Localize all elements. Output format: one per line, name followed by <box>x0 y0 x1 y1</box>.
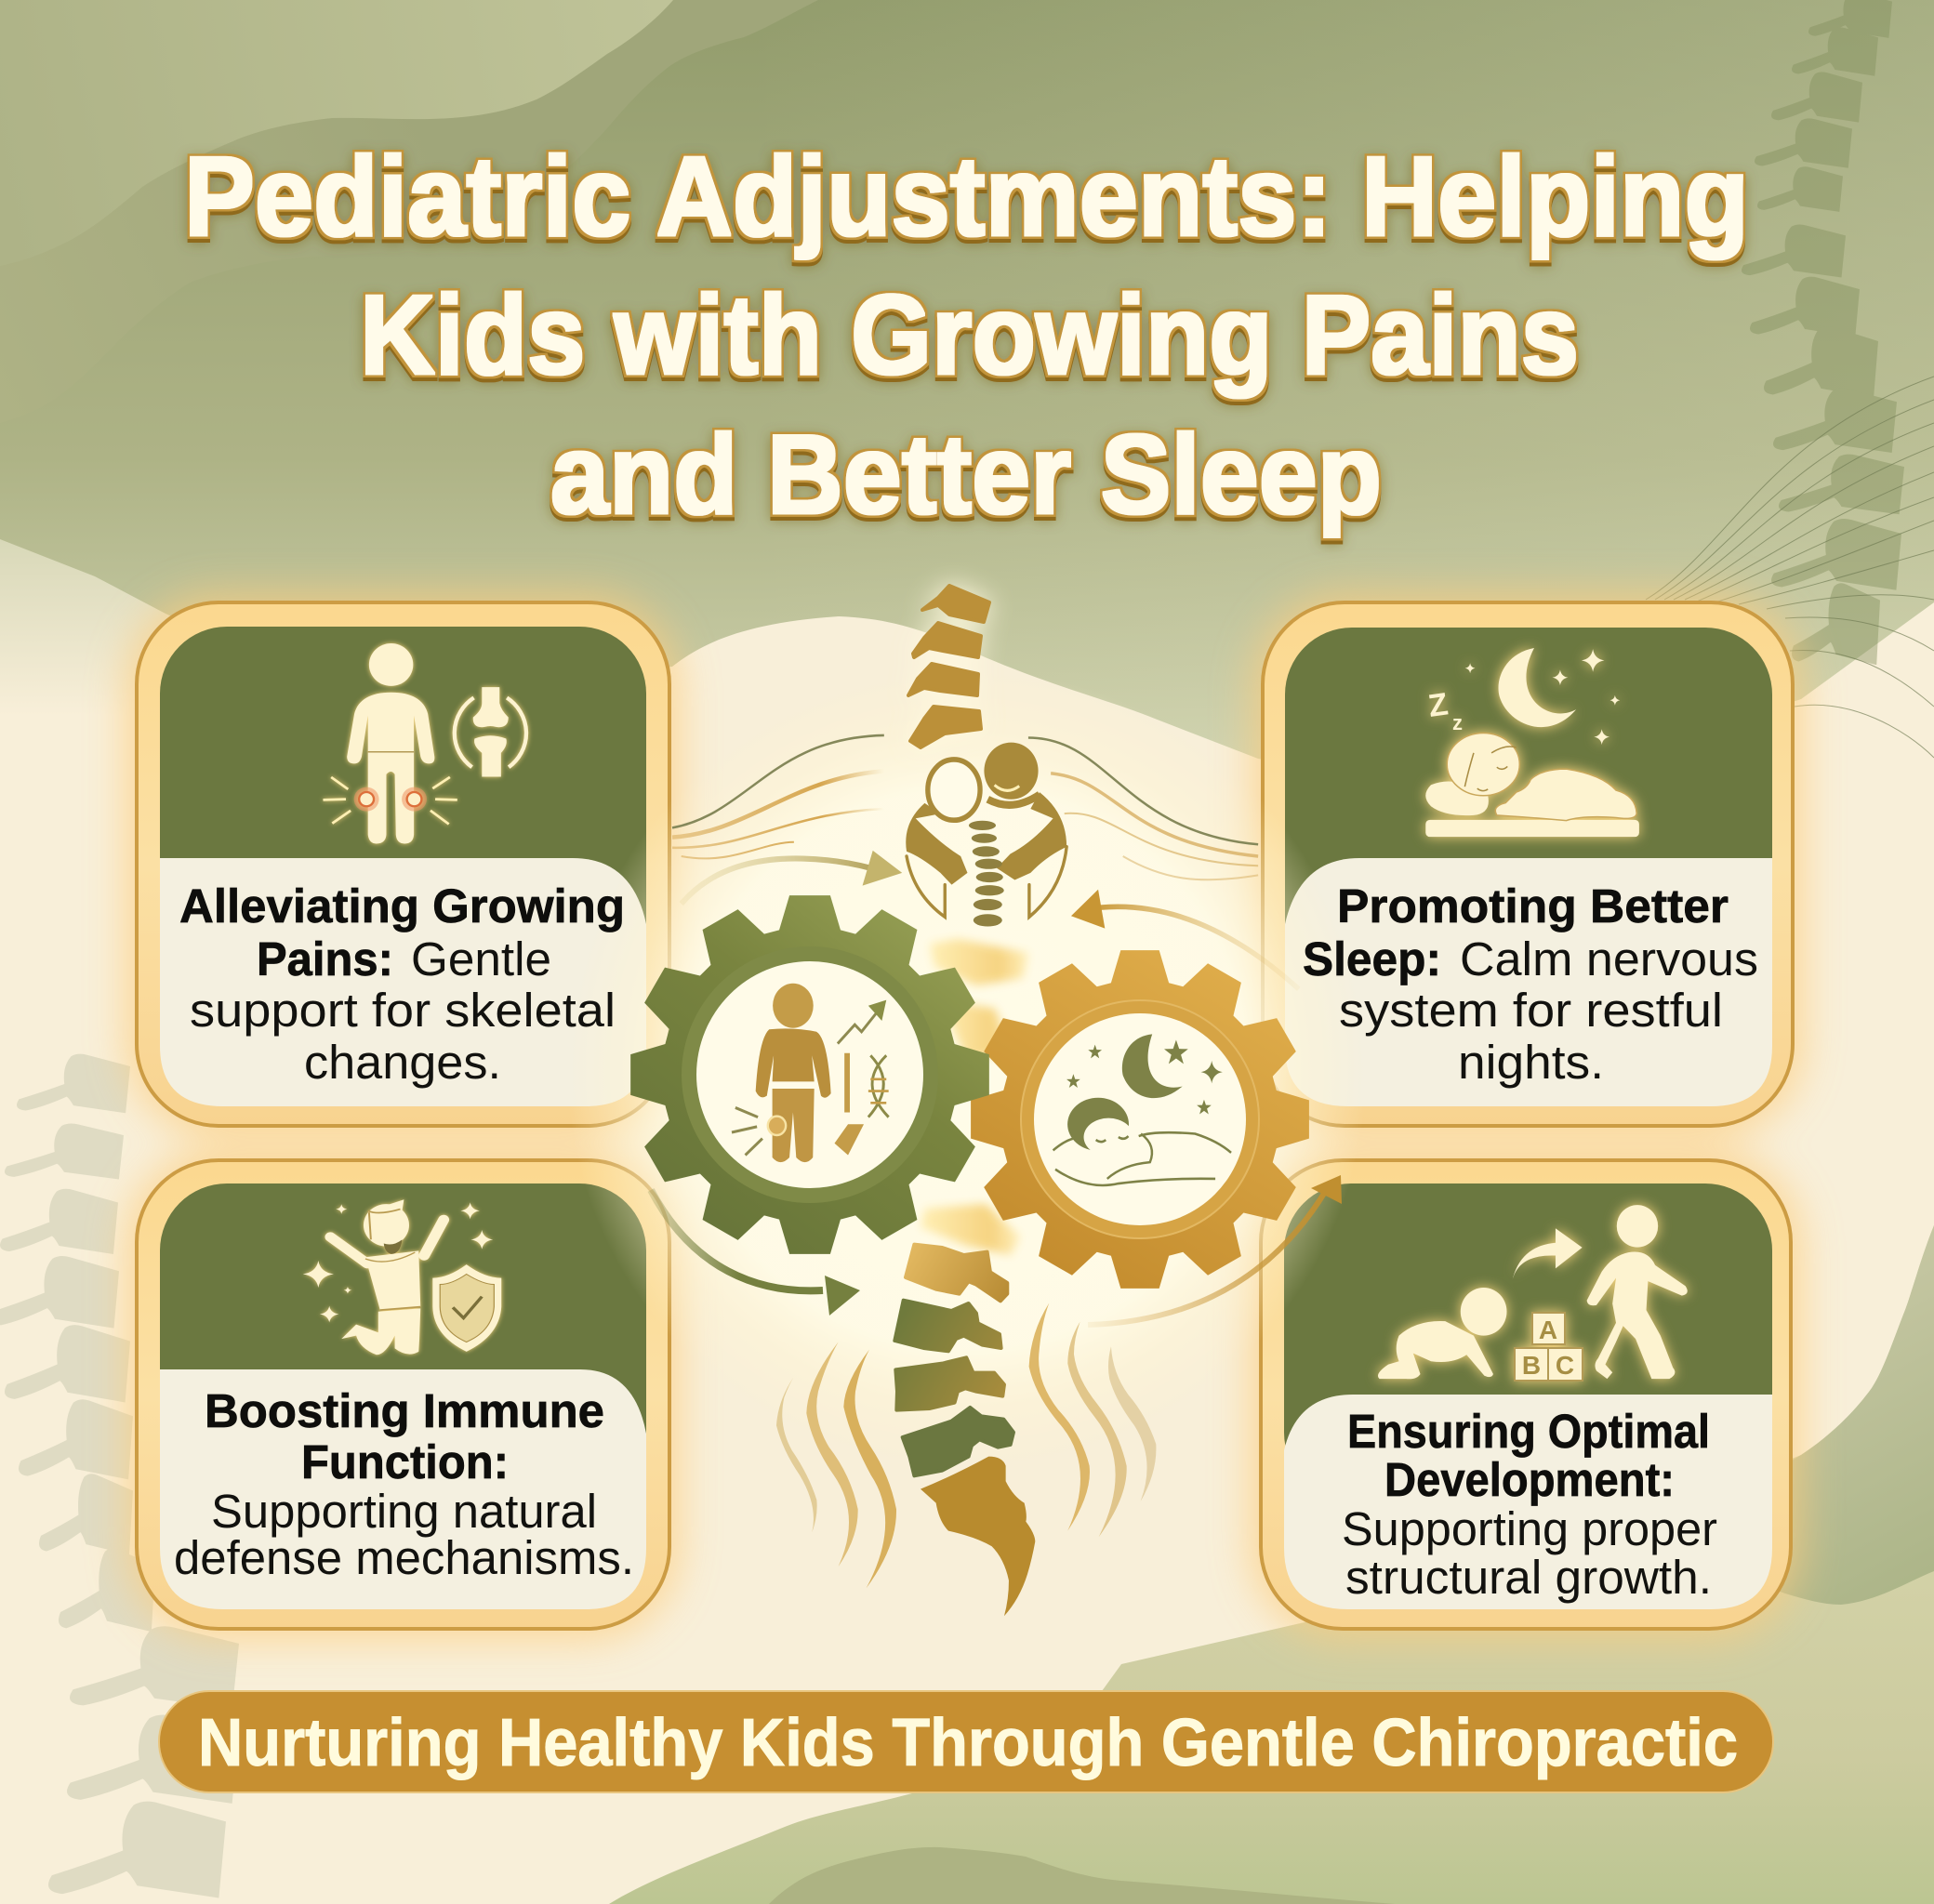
spine: upper vertebrae <box>908 586 989 747</box>
icon: crawling baby, blocks and walking child: B <box>1522 1351 1541 1380</box>
panel: card 1 frame <box>137 602 669 1126</box>
icon: sleeping child with moon and stars: Z <box>1426 686 1450 724</box>
icon: crawling baby, blocks and walking child <box>1378 1205 1688 1381</box>
icon: sleeping child with moon and stars: z <box>1452 711 1463 734</box>
text: alleviating growing pains: support for skeletal <box>190 984 616 1037</box>
panel: card 2 frame <box>1263 602 1793 1126</box>
text: promoting better sleep: nights. <box>1458 1036 1604 1089</box>
title <box>184 133 1749 537</box>
decorative energy waves beside the lower spine <box>776 1303 1156 1588</box>
background: left spine silhouette <box>0 1054 239 1898</box>
card glows <box>126 593 1803 1639</box>
text: ensuring optimal development <box>1342 1405 1717 1604</box>
text: ensuring optimal development: Supporting proper <box>1342 1502 1717 1555</box>
arrow: from left gear to lower spine <box>651 1190 860 1316</box>
background: fine nerve lines on the right <box>1646 377 1934 758</box>
title: and Better Sleep <box>550 411 1382 537</box>
center glow <box>549 660 1385 1478</box>
text: boosting immune function <box>174 1384 634 1584</box>
background: right spine silhouette <box>1742 0 1904 665</box>
arrow: from right gear to development card <box>1088 1175 1342 1325</box>
gear: right gold gear with sleeping child <box>971 950 1309 1289</box>
icon: crawling baby, blocks and walking child: A <box>1539 1316 1557 1344</box>
text: alleviating growing pains: Alleviating Growing <box>179 879 625 932</box>
text: alleviating growing pains <box>179 879 625 1089</box>
title: Pediatric Adjustments: Helping <box>184 133 1749 259</box>
text: alleviating growing pains: Gentle <box>411 932 551 985</box>
text: promoting better sleep <box>1303 879 1758 1089</box>
text: boosting immune function: Boosting Immune <box>205 1384 604 1437</box>
text: ensuring optimal development: Ensuring Optimal <box>1347 1405 1710 1458</box>
text: promoting better sleep: Sleep: <box>1303 932 1441 985</box>
text: boosting immune function: Supporting natural <box>211 1485 597 1538</box>
text: ensuring optimal development: Development: <box>1384 1453 1675 1506</box>
text: promoting better sleep: Promoting Better <box>1337 879 1729 932</box>
panel: card 4 frame <box>1261 1160 1791 1629</box>
icon: happy jumping child with shield <box>303 1199 501 1355</box>
banner: Nurturing Healthy Kids Through Gentle Chiropractic <box>198 1706 1738 1780</box>
gear: left olive gear with child and growth <box>630 895 989 1254</box>
connecting waves at top of the centre <box>672 735 1258 879</box>
panel: card 3 frame <box>137 1160 669 1629</box>
text: promoting better sleep: Calm nervous <box>1460 932 1758 985</box>
text: ensuring optimal development: structural growth. <box>1345 1551 1712 1604</box>
text: promoting better sleep: system for restful <box>1339 984 1723 1037</box>
spine: lumbar vertebrae and sacrum <box>894 1245 1035 1616</box>
icon: crawling baby, blocks and walking child: C <box>1556 1351 1574 1380</box>
arrow: from better sleep to spine <box>1071 890 1299 989</box>
arrow: from growing pains to spine <box>682 851 902 904</box>
text: alleviating growing pains: changes. <box>304 1036 501 1089</box>
icon: parent hugging child with spine <box>906 743 1066 927</box>
text: boosting immune function: defense mechanisms. <box>174 1531 634 1584</box>
icon: sleeping child with moon and stars <box>1425 648 1639 837</box>
text: boosting immune function: Function: <box>301 1435 509 1488</box>
text: alleviating growing pains: Pains: <box>257 932 393 985</box>
spine: pale middle vertebrae <box>921 939 1028 1255</box>
title: Kids with Growing Pains <box>360 271 1579 398</box>
icon: child with painful knees and joint <box>323 643 526 843</box>
banner <box>159 1691 1773 1792</box>
